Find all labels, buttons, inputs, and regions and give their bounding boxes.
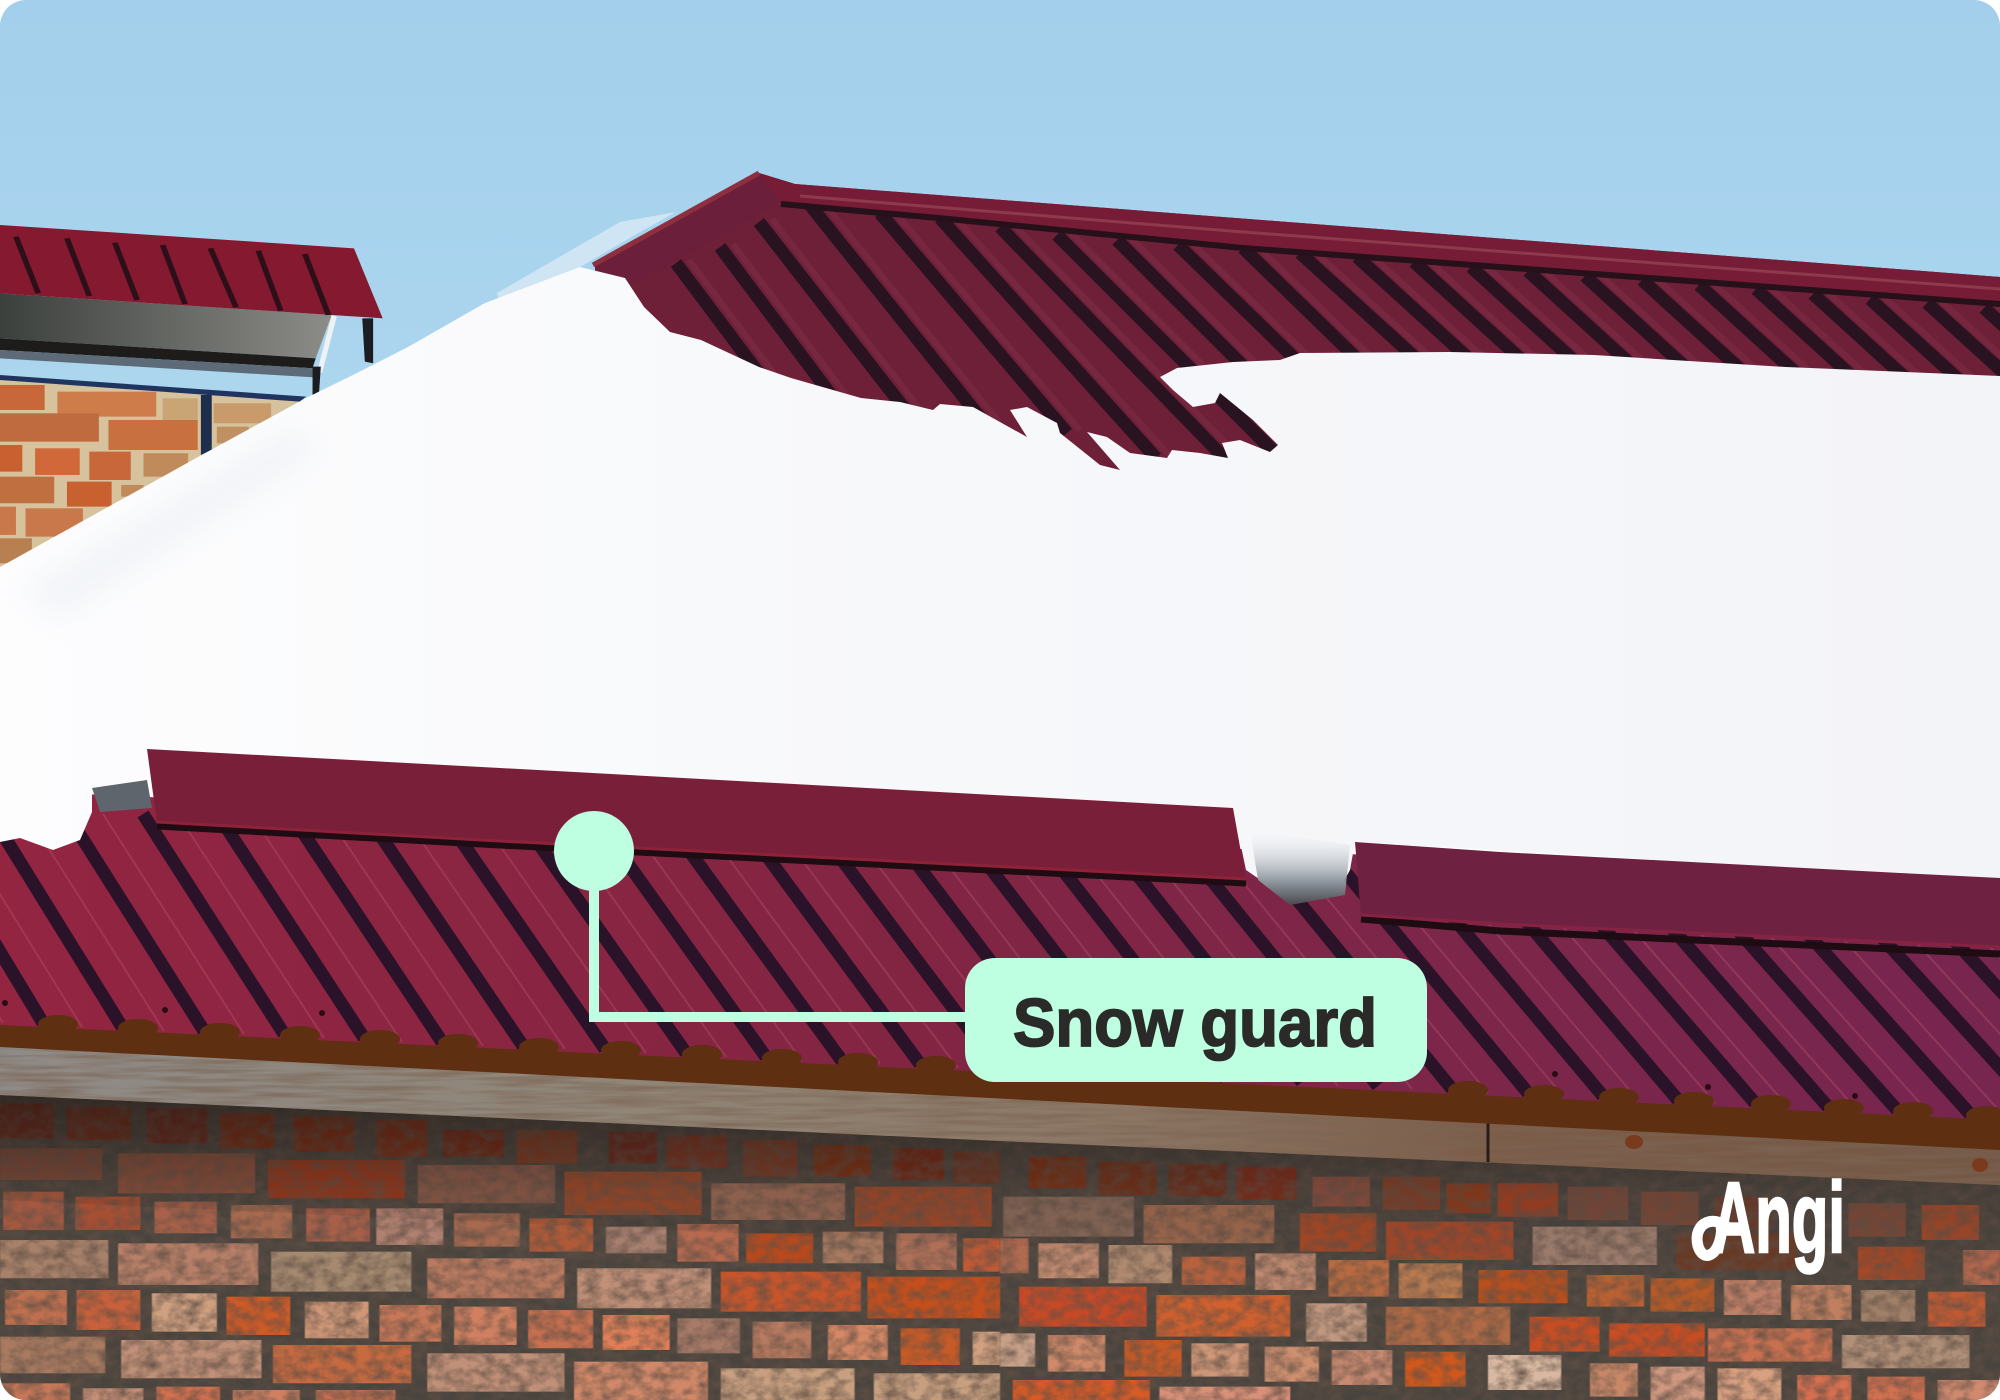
snow guard sections	[147, 749, 2000, 954]
lower wall and timber	[0, 1030, 2000, 1400]
shadow below beam	[0, 1095, 2000, 1290]
left snow guard	[147, 749, 1246, 880]
main snow mass	[0, 267, 2000, 905]
bricks left half	[0, 1103, 1000, 1400]
lower roof highlights and ribs	[0, 803, 2000, 1124]
callout label	[965, 958, 1427, 1082]
label pill	[965, 958, 1427, 1082]
right snow guard	[1355, 842, 2000, 948]
hip band	[595, 173, 781, 287]
sky background	[0, 0, 2000, 700]
lower roof panels	[0, 790, 2000, 1125]
brick wall behind snow	[0, 375, 306, 570]
snow surface shading	[20, 430, 320, 620]
upper roof ribs	[670, 209, 2000, 458]
guard shadows	[157, 826, 1246, 883]
wall mottling	[0, 1085, 2000, 1400]
gutter	[0, 338, 316, 368]
upper roof panels	[595, 173, 2000, 480]
callout: leader line and marker	[554, 811, 970, 1017]
upper roof	[593, 173, 2000, 488]
bricks right half	[1000, 1157, 2000, 1400]
translucent snow ghost at ridge	[497, 212, 676, 302]
small red roof	[0, 225, 383, 318]
timber beam	[0, 1030, 2000, 1185]
rusty eave band	[0, 1025, 2000, 1150]
upper ridge band	[759, 173, 2000, 302]
grey soffit	[0, 293, 332, 358]
marker dot	[554, 811, 634, 891]
leader line	[594, 880, 970, 1017]
beam grain	[0, 1048, 2000, 1181]
shaded snow between guards	[1250, 830, 1350, 905]
lower roof	[0, 790, 2000, 1150]
Angi logo	[1697, 1162, 1845, 1274]
small background building	[0, 225, 383, 570]
brick wall mortar	[0, 1085, 2000, 1400]
corrugation humps	[38, 1015, 2000, 1124]
snow shadow near left eave	[92, 780, 152, 812]
screws	[2, 1000, 1858, 1099]
label text: Snow guard	[1013, 985, 1377, 1061]
logo wordmark: Angi	[1712, 1162, 1845, 1274]
logo loop	[1697, 1221, 1732, 1255]
